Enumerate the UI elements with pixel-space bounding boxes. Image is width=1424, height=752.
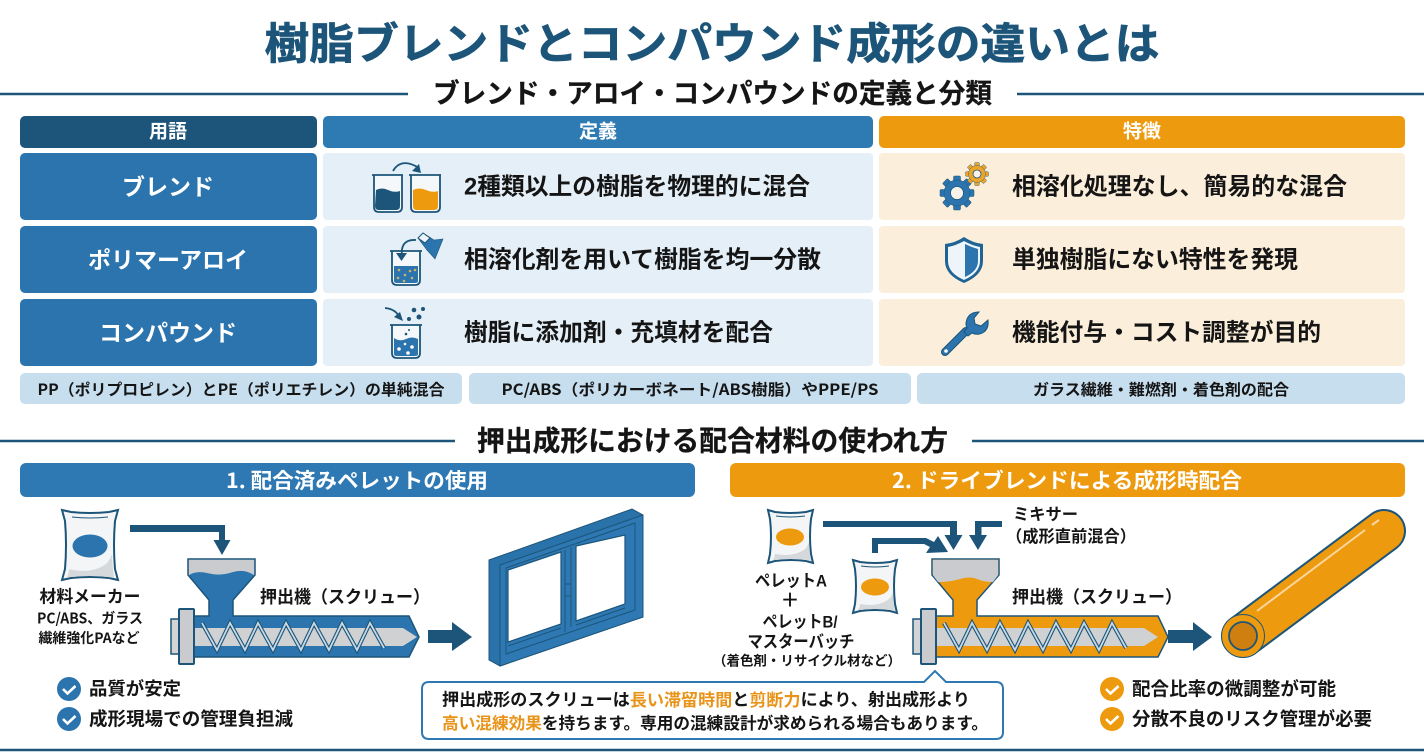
row: blend definition xyxy=(323,153,873,220)
icon: pipe xyxy=(1222,520,1384,658)
list: method 1 benefits xyxy=(57,677,293,731)
example bars xyxy=(20,373,1405,404)
list: method 2 notes: 配合比率の微調整が可能 xyxy=(1132,678,1336,700)
extruder 2 xyxy=(913,559,1168,664)
arrow: bag to hopper xyxy=(130,525,230,555)
header: term xyxy=(20,116,317,148)
header: features xyxy=(879,116,1405,148)
label: material maker xyxy=(37,588,143,648)
banner: method 2 xyxy=(730,463,1405,497)
icon: material bag xyxy=(62,510,118,580)
banner: method 2: 2. ドライブレンドによる成形時配合 xyxy=(892,465,1242,495)
check icon xyxy=(1100,707,1124,731)
icon: wrench xyxy=(944,312,988,353)
icon: two beakers xyxy=(372,163,441,212)
row: blend term: ブレンド xyxy=(122,174,214,200)
label: material maker: 材料メーカー xyxy=(40,588,140,606)
label: pellets xyxy=(713,572,901,668)
banner: method 1: 1. 配合済みペレットの使用 xyxy=(226,465,488,495)
arrow: pellet A to hopper xyxy=(823,521,962,550)
banner: method 1 xyxy=(20,463,695,497)
text: 相溶化剤を用いて樹脂を均一分散 xyxy=(464,246,821,274)
row: compound term xyxy=(20,299,317,366)
label: material maker: 繊維強化PAなど xyxy=(38,628,140,648)
row: blend term xyxy=(20,153,317,220)
header: definition: 定義 xyxy=(579,120,617,142)
arrow: mixer to hopper xyxy=(969,521,1002,550)
text: 機能付与・コスト調整が目的 xyxy=(1012,318,1321,346)
label: mixer xyxy=(1006,506,1136,546)
label: mixer: （成形直前混合） xyxy=(1006,526,1136,546)
check icon xyxy=(1100,677,1124,701)
callout: 高い混練効果を持ちます。専用の混練設計が求められる場合もあります。 xyxy=(442,713,988,733)
example: compound xyxy=(917,373,1405,404)
arrow: extruder to pipe xyxy=(1168,622,1212,651)
icon: window frame xyxy=(489,509,643,666)
callout xyxy=(422,671,1003,739)
example: blend xyxy=(20,373,462,404)
row: blend features xyxy=(879,153,1405,220)
text: 樹脂に添加剤・充填材を配合 xyxy=(464,320,773,346)
arrow: pellet B to hopper xyxy=(872,536,948,553)
label: mixer: ミキサー xyxy=(1013,506,1078,524)
list: method 2 notes: 分散不良のリスク管理が必要 xyxy=(1132,708,1372,730)
example: alloy xyxy=(469,373,911,404)
row: alloy term: ポリマーアロイ xyxy=(88,247,248,273)
row: alloy features xyxy=(879,226,1405,293)
row: alloy term xyxy=(20,226,317,293)
icon: shield xyxy=(945,237,983,283)
label: material maker: PC/ABS、ガラス xyxy=(37,608,143,628)
icon: additives falling into beaker xyxy=(385,307,425,358)
text: 単独樹脂にない特性を発現 xyxy=(1012,246,1298,274)
text: 相溶化処理なし、簡易的な混合 xyxy=(1012,174,1347,200)
check icon xyxy=(57,677,81,701)
header: features: 特徴 xyxy=(1123,120,1161,142)
label: pellets: （着色剤・リサイクル材など） xyxy=(713,652,901,668)
label: pellets: ＋ xyxy=(780,590,800,612)
row: alloy definition xyxy=(323,226,873,293)
check icon xyxy=(57,707,81,731)
table: definitions and classification xyxy=(20,116,1405,366)
icon: pellet bag A xyxy=(768,510,813,563)
section heading: definitions: ブレンド・アロイ・コンパウンドの定義と分類 xyxy=(433,78,992,109)
callout: 押出成形のスクリューは長い滞留時間と剪断力により、射出成形より xyxy=(442,690,970,710)
icon: gears xyxy=(940,162,988,210)
example: blend: PP（ポリプロピレン）とPE（ポリエチレン）の単純混合 xyxy=(38,378,445,400)
row: compound features xyxy=(879,299,1405,366)
label: pellets: マスターバッチ xyxy=(748,632,854,652)
row: compound term: コンパウンド xyxy=(99,320,237,346)
label: pellets: ペレットA xyxy=(755,572,827,590)
row: compound definition xyxy=(323,299,873,366)
list: method 1 benefits: 成形現場での管理負担減 xyxy=(89,708,293,730)
example: compound: ガラス繊維・難燃剤・着色剤の配合 xyxy=(1033,378,1290,400)
header: term: 用語 xyxy=(149,122,187,142)
example: alloy: PC/ABS（ポリカーボネート/ABS樹脂）やPPE/PS xyxy=(502,378,879,400)
label: extruder 1: 押出機（スクリュー） xyxy=(260,587,430,607)
icon: flask pouring into beaker xyxy=(390,233,443,285)
list: method 1 benefits: 品質が安定 xyxy=(89,678,181,699)
header: definition xyxy=(323,116,873,148)
icon: pellet bag B xyxy=(853,560,897,613)
section heading: extrusion: 押出成形における配合材料の使われ方 xyxy=(477,426,948,456)
arrow: extruder to window xyxy=(428,622,472,651)
text: 2種類以上の樹脂を物理的に混合 xyxy=(464,174,810,200)
title: 樹脂ブレンドとコンパウンド成形の違いとは xyxy=(264,21,1160,69)
list: method 2 notes xyxy=(1100,677,1372,731)
label: extruder 2: 押出機（スクリュー） xyxy=(1012,587,1182,607)
extruder 1 xyxy=(171,559,419,664)
label: pellets: ペレットB/ xyxy=(762,612,838,632)
